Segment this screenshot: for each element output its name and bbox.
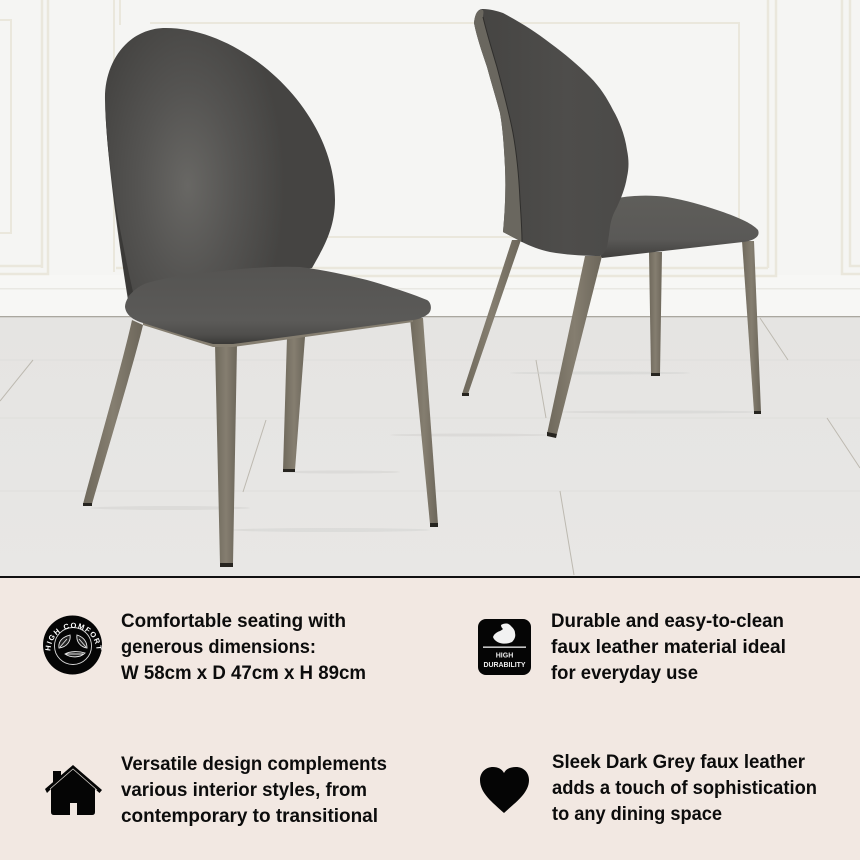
right chair seam [483, 17, 522, 242]
left chair legs [83, 318, 438, 564]
chair: left chair front view [83, 28, 438, 567]
text: seating dimensions: W 58cm x D 47cm x H 89cm [121, 663, 366, 684]
chair: right chair rear view [462, 9, 761, 438]
icon: high durability badge: DURABILITY [484, 662, 526, 669]
text: sleek dark grey: to any dining space [552, 804, 722, 825]
left chair seat rail [143, 318, 413, 347]
icon: high durability badge [478, 619, 531, 675]
left chair side edge [105, 100, 133, 296]
photo: wall and floor background [0, 0, 860, 577]
text: seating dimensions: Comfortable seating with [121, 611, 346, 632]
text: durable material: faux leather material ideal [551, 637, 786, 658]
text: durable material: for everyday use [551, 663, 698, 684]
text: seating dimensions [121, 611, 366, 684]
text: durable material [551, 611, 786, 684]
left chair back rest [105, 28, 335, 300]
text: versatile design [121, 754, 387, 827]
text: durable material: Durable and easy-to-clean [551, 611, 784, 632]
text: sleek dark grey: Sleek Dark Grey faux leather [552, 752, 806, 773]
icon: house [45, 765, 102, 815]
text: versatile design: Versatile design complements [121, 754, 387, 775]
right chair side edge [474, 10, 522, 242]
text: versatile design: contemporary to transitional [121, 806, 378, 827]
information panel [0, 576, 860, 827]
icon: high comfort badge: HIGH COMFORT [45, 622, 102, 651]
icon: heart [480, 767, 529, 813]
right chair legs [462, 240, 761, 434]
icon: high durability badge: HIGH [496, 652, 513, 660]
text: versatile design: various interior styles, from [121, 780, 367, 801]
right chair seat [585, 196, 759, 258]
text: seating dimensions: generous dimensions: [121, 637, 316, 658]
text: sleek dark grey [552, 752, 817, 825]
text: sleek dark grey: adds a touch of sophistication [552, 778, 817, 799]
right chair back panel [474, 9, 628, 256]
left chair seat cushion [125, 267, 431, 344]
icon: high comfort badge [43, 616, 102, 674]
